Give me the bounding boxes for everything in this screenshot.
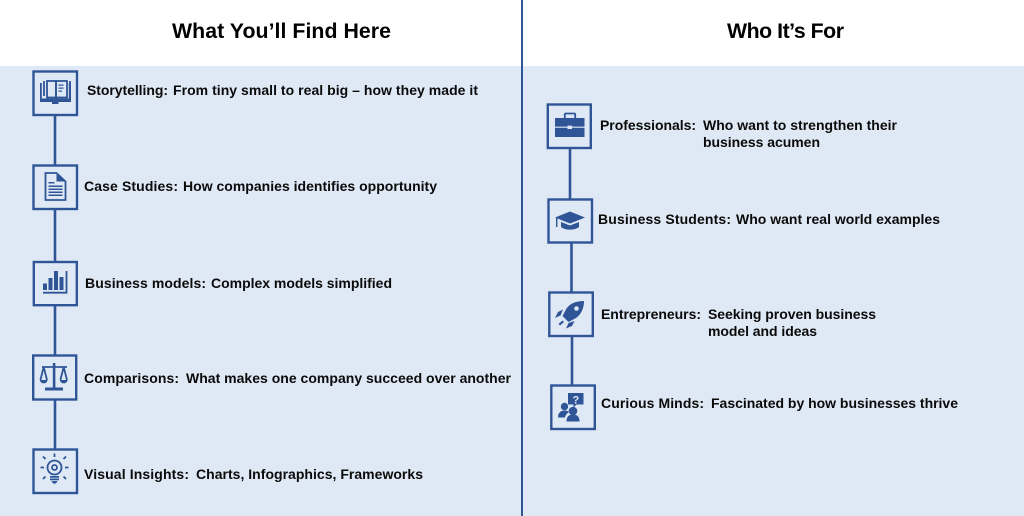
item: business students (548, 200, 940, 242)
item: case studies (34, 166, 437, 209)
description: curious minds: Fascinated by how businesses thrive (711, 395, 958, 411)
label: business models: Business models: (85, 275, 206, 291)
description line 2: professionals: business acumen (703, 134, 820, 150)
icon: graduation cap (548, 200, 592, 242)
item: comparisons (33, 356, 512, 400)
description: entrepreneurs: Seeking proven business (708, 306, 876, 322)
description line 2: entrepreneurs: model and ideas (708, 323, 817, 339)
item: visual insights (34, 450, 423, 493)
icon: bar chart (34, 262, 77, 305)
timeline connector left (54, 115, 56, 449)
heading: What You'll Find Here: What You’ll Find Here (172, 19, 391, 43)
icon: rocket (549, 292, 593, 336)
icon: light bulb (34, 450, 77, 493)
label: case studies: Case Studies: (84, 178, 178, 194)
description: professionals: Who want to strengthen their (703, 117, 898, 133)
icon: people with question bubble: ? (572, 394, 580, 406)
label: visual insights: Visual Insights: (84, 466, 189, 482)
item: storytelling (34, 72, 478, 115)
label: storytelling: Storytelling: (87, 82, 168, 98)
item: business models (34, 262, 392, 305)
item: entrepreneurs (549, 292, 876, 339)
icon: balance scale (33, 356, 76, 400)
label: comparisons: Comparisons: (84, 370, 179, 386)
label: business students: Business Students: (598, 211, 731, 227)
description: case studies: How companies identifies opportunity (183, 178, 437, 194)
icon: briefcase (548, 104, 591, 148)
label: entrepreneurs: Entrepreneurs: (601, 306, 701, 322)
icon: open book (34, 72, 77, 115)
timeline connector right (570, 148, 572, 385)
description: storytelling: From tiny small to real big – how they made it (173, 82, 478, 98)
heading: Who It's For: Who It’s For (727, 19, 844, 43)
description: comparisons: What makes one company succeed over another (186, 370, 512, 386)
description: business students: Who want real world examples (736, 211, 940, 227)
label: curious minds: Curious Minds: (601, 395, 704, 411)
item: curious minds (551, 386, 958, 429)
panel: who it's for (548, 104, 958, 429)
icon: people with question bubble (551, 386, 595, 429)
column divider (521, 0, 523, 516)
description: visual insights: Charts, Infographics, Frameworks (196, 466, 423, 482)
panel: what you'll find here (33, 72, 512, 493)
description: business models: Complex models simplified (211, 275, 392, 291)
item: professionals (548, 104, 898, 150)
label: professionals: Professionals: (600, 117, 696, 133)
icon: document (34, 166, 77, 209)
